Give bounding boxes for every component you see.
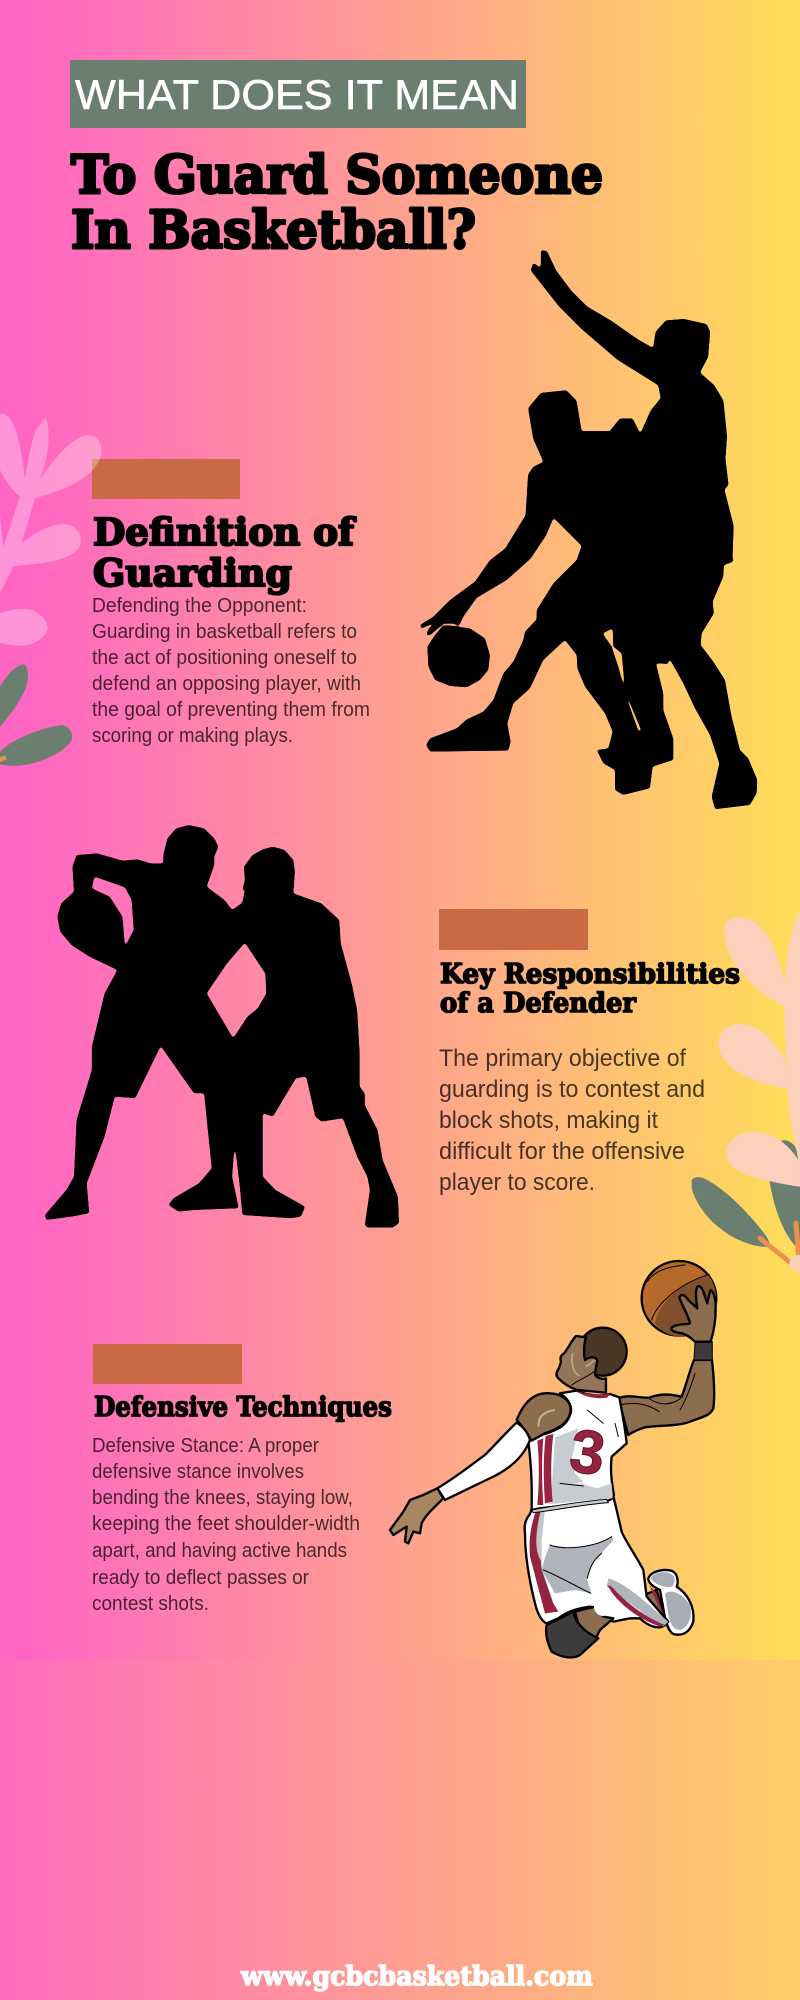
head: [556, 1328, 627, 1393]
shoulder: [517, 1393, 571, 1441]
heading: definition of guarding: [93, 510, 356, 595]
panel: key responsibilities of a defender: [439, 909, 740, 1196]
body text: techniques: contest shots.: [92, 1593, 209, 1615]
body text: techniques: [92, 1435, 360, 1615]
title banner: WHAT DOES IT MEAN: [75, 71, 519, 118]
green leaves: [692, 1140, 800, 1250]
sleeve: [437, 1423, 530, 1500]
body text: responsibilities: [439, 1045, 705, 1196]
title: [70, 60, 603, 261]
title banner: [70, 60, 526, 128]
decoration: right leaves: [692, 912, 800, 1272]
body text: responsibilities: difficult for the offensive: [439, 1138, 685, 1165]
lower gradient background: [0, 1660, 800, 2000]
orange label block: [93, 1344, 242, 1384]
jersey: [528, 1391, 627, 1510]
body text: definition: defend an opposing player, with: [92, 673, 361, 695]
raised hand: [671, 1286, 716, 1342]
body text: responsibilities: player to score.: [439, 1169, 595, 1196]
body text: definition: the goal of preventing them from: [92, 699, 370, 721]
raised arm: [618, 1360, 714, 1435]
silhouette: two players facing off: [45, 825, 399, 1228]
heading: key responsibilities: of a Defender: [440, 988, 637, 1019]
body text: responsibilities: guarding is to contest and: [439, 1076, 705, 1103]
body text: definition: the act of positioning oneself to: [92, 647, 357, 669]
silhouette: two players guarding with ball: [420, 250, 757, 809]
main heading: To Guard Someone: [71, 145, 603, 206]
orange label block: [92, 459, 240, 499]
legs and dribbled ball: [426, 560, 757, 809]
upper bodies and arms: [420, 250, 734, 635]
body text: techniques: ready to deflect passes or: [92, 1567, 309, 1589]
body text: responsibilities: block shots, making it: [439, 1107, 658, 1134]
heading: definition of guarding: Guarding: [93, 551, 292, 595]
decoration: left green leaves: [0, 664, 72, 766]
body text: techniques: apart, and having active hands: [92, 1540, 347, 1562]
basketball: [642, 1261, 716, 1337]
body text: definition: [92, 595, 370, 747]
body text: techniques: defensive stance involves: [92, 1461, 304, 1483]
wristband: [694, 1342, 712, 1360]
panel: defensive techniques: [92, 1344, 392, 1615]
orange stems: [760, 1223, 798, 1265]
heading: key responsibilities: Key Responsibilities: [440, 959, 740, 990]
orange label block: [439, 909, 588, 950]
upper body: arm, head, jersey: [517, 1328, 714, 1513]
illustration: player dunking: [390, 1261, 716, 1657]
main heading: In Basketball?: [71, 200, 476, 261]
panel: definition of guarding: [92, 459, 370, 747]
left arm and hand: [390, 1286, 716, 1543]
footer url: www.gcbcbasketball.com: [240, 1962, 593, 1992]
body text: techniques: bending the knees, staying low,: [92, 1487, 353, 1509]
body text: responsibilities: The primary objective of: [439, 1045, 686, 1072]
jersey number: 3: [566, 1416, 609, 1489]
shoe: [648, 1570, 694, 1635]
waistband: [532, 1499, 608, 1513]
body text: definition: Guarding in basketball refers to: [92, 621, 357, 643]
body text: techniques: Defensive Stance: A proper: [92, 1435, 319, 1457]
trailing hand: [390, 1488, 443, 1543]
lower body: leg, shoe and shorts: [525, 1492, 694, 1657]
heading: key responsibilities: [440, 959, 740, 1019]
peach leaves: [718, 912, 800, 1272]
leg and knee: [546, 1597, 613, 1657]
decoration: left pale leaves: [0, 413, 102, 646]
main heading: [71, 145, 603, 261]
heading: definition of guarding: Definition of: [93, 510, 356, 554]
body text: techniques: keeping the feet shoulder-width: [92, 1513, 360, 1535]
body text: definition: scoring or making plays.: [92, 725, 293, 747]
body text: definition: Defending the Opponent:: [92, 595, 307, 617]
heading: defensive techniques: Defensive Techniques: [94, 1392, 392, 1423]
shorts: [525, 1492, 668, 1627]
